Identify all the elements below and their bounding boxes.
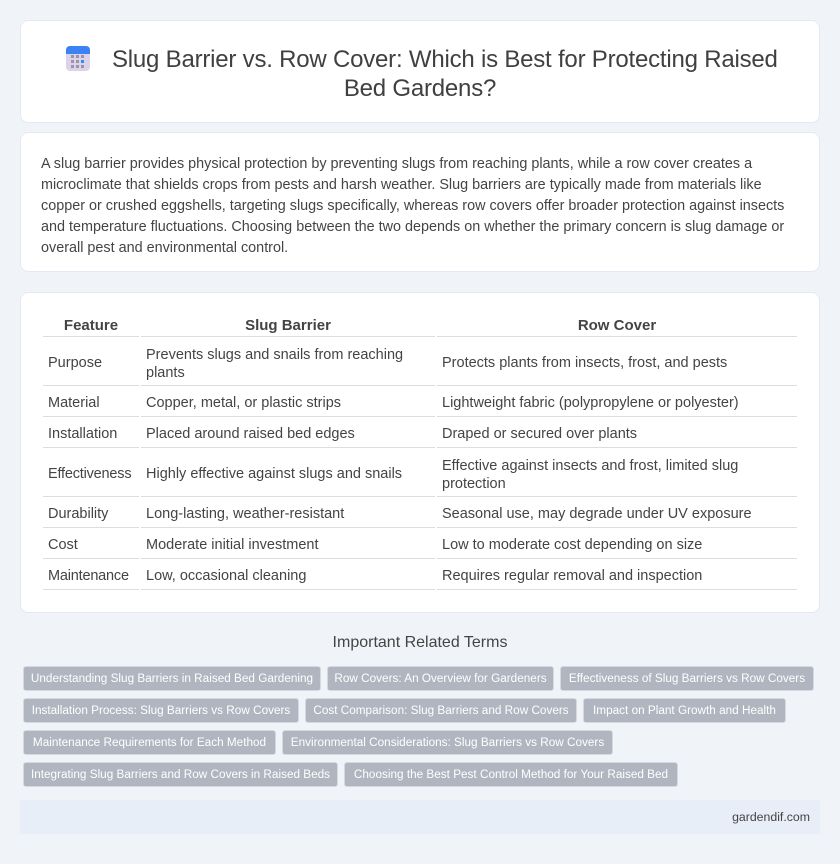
- table rows: Prevents slugs and snails from reaching: [146, 347, 403, 363]
- related term tags: [23, 666, 814, 787]
- table rows: Placed around raised bed edges: [146, 426, 355, 442]
- icon: calendar: [66, 46, 90, 71]
- related term tags: Effectiveness of Slug Barriers vs Row Covers: [569, 672, 805, 685]
- table rows: [43, 336, 797, 590]
- footer: [20, 800, 820, 834]
- title: Slug Barrier vs. Row Cover: Which is Best for Protecting Raised: [112, 46, 778, 73]
- title: [112, 46, 778, 102]
- header panel: [20, 20, 820, 123]
- related term tags: Understanding Slug Barriers in Raised Bed Gardening: [31, 672, 313, 685]
- table rows: Material: [48, 395, 100, 411]
- table rows: protection: [442, 476, 506, 492]
- table header: Slug Barrier: [245, 317, 331, 334]
- title: Bed Gardens?: [344, 75, 496, 102]
- related term tags: Integrating Slug Barriers and Row Covers in Raised Beds: [31, 768, 330, 781]
- intro paragraph: [41, 156, 784, 256]
- table rows: Highly effective against slugs and snails: [146, 466, 402, 482]
- table header: [64, 317, 656, 334]
- table rows: Long-lasting, weather-resistant: [146, 506, 344, 522]
- related terms heading: Important Related Terms: [333, 634, 507, 651]
- related term tags: Row Covers: An Overview for Gardeners: [334, 672, 547, 685]
- footer: gardendif.com: [732, 810, 810, 824]
- related term tags: Impact on Plant Growth and Health: [593, 704, 776, 717]
- table rows: Requires regular removal and inspection: [442, 568, 702, 584]
- table rows: Lightweight fabric (polypropylene or polyester): [442, 395, 739, 411]
- table rows: plants: [146, 365, 185, 381]
- table rows: Maintenance: [48, 568, 129, 584]
- intro paragraph: overall pest and environmental control.: [41, 240, 288, 256]
- intro paragraph: and temperature fluctuations. Choosing between the two depends on whether the primary concern is slug damage or: [41, 219, 784, 235]
- table rows: Moderate initial investment: [146, 537, 318, 553]
- table rows: Draped or secured over plants: [442, 426, 637, 442]
- table rows: Cost: [48, 537, 78, 553]
- table header: Feature: [64, 317, 118, 334]
- table rows: Copper, metal, or plastic strips: [146, 395, 341, 411]
- table rows: Effectiveness: [48, 466, 131, 482]
- table rows: Effective against insects and frost, limited slug: [442, 458, 738, 474]
- intro paragraph: copper or crushed eggshells, targeting slugs specifically, whereas row covers offer broader protection against insects: [41, 198, 784, 214]
- related term tags: Choosing the Best Pest Control Method for Your Raised Bed: [354, 768, 668, 781]
- related term tags: Cost Comparison: Slug Barriers and Row Covers: [313, 704, 569, 717]
- intro paragraph: microclimate that shields crops from pests and harsh weather. Slug barriers are typically made from materials like: [41, 177, 762, 193]
- panel: intro text: [20, 132, 820, 272]
- related term tags: Installation Process: Slug Barriers vs Row Covers: [32, 704, 290, 717]
- related term tags: Environmental Considerations: Slug Barriers vs Row Covers: [291, 736, 604, 749]
- table header: Row Cover: [578, 317, 656, 334]
- table rows: Protects plants from insects, frost, and pests: [442, 355, 727, 371]
- table rows: Low, occasional cleaning: [146, 568, 306, 584]
- panel: comparison table: [20, 292, 820, 613]
- related term tags: Maintenance Requirements for Each Method: [33, 736, 266, 749]
- table rows: Durability: [48, 506, 108, 522]
- table rows: Purpose: [48, 355, 102, 371]
- table rows: Seasonal use, may degrade under UV exposure: [442, 506, 752, 522]
- table rows: Installation: [48, 426, 117, 442]
- intro paragraph: A slug barrier provides physical protection by preventing slugs from reaching plants, while a row cover creates a: [41, 156, 752, 172]
- table rows: Low to moderate cost depending on size: [442, 537, 702, 553]
